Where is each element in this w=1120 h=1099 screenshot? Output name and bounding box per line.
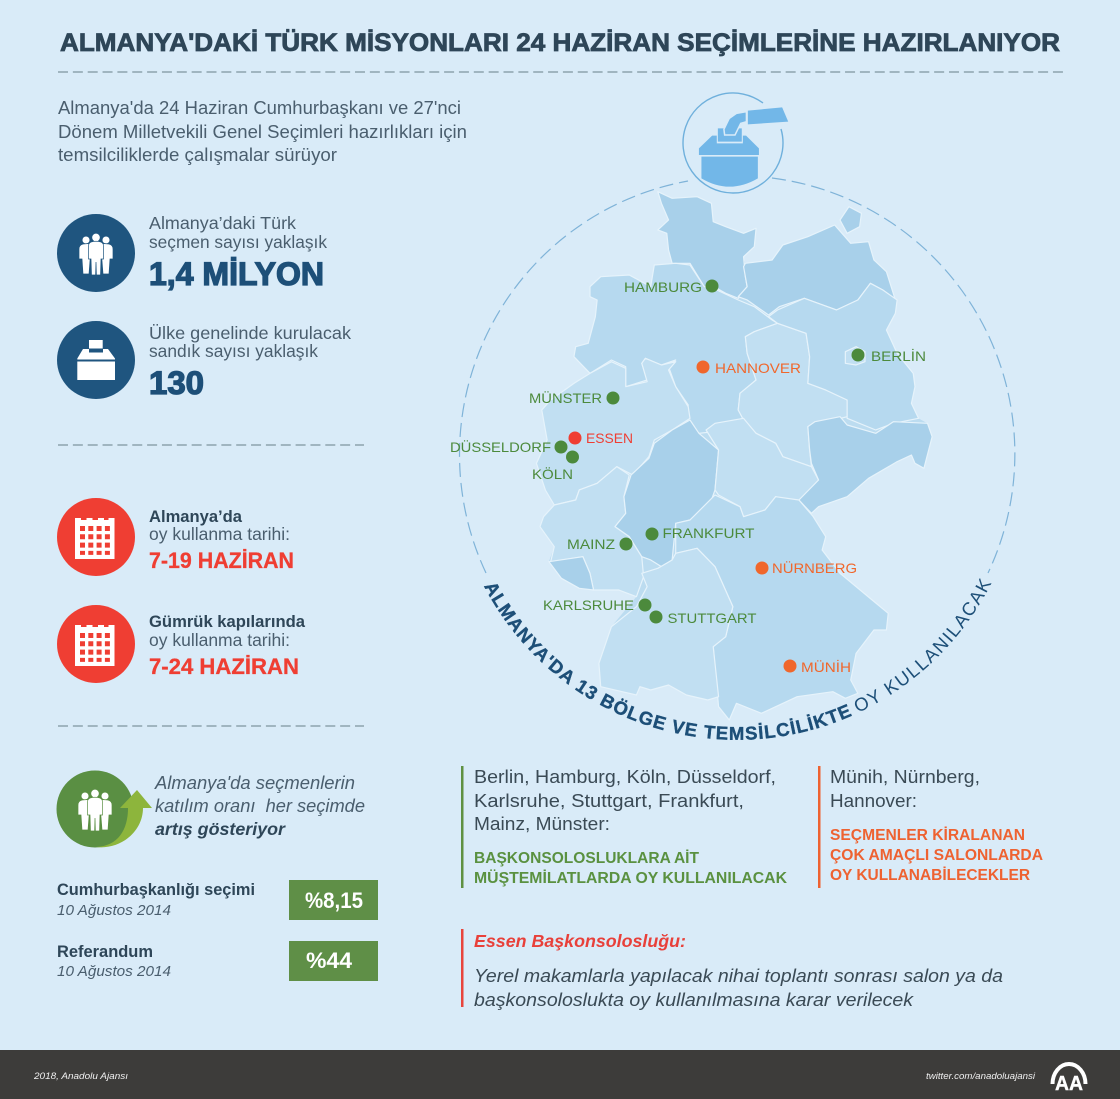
dashed circle [460,178,1015,573]
city: Mainz [567,536,632,552]
turnout callout: artış gösteriyor [155,819,286,839]
city: Münih [784,658,851,675]
voting date: Germany [57,498,294,576]
panel: consulates: Berlin, Hamburg, Köln, Düsseldorf, [474,767,776,787]
panel: consulates: Mainz, Münster: [474,814,610,834]
icon: ballot box with hand [683,93,788,193]
city: Düsseldorf: DÜSSELDORF [450,438,551,455]
city: Münster: MÜNSTER [529,389,602,406]
state: Schleswig-Holstein [658,192,756,298]
city: Hannover: HANNOVER [715,360,801,376]
icon: calendar [57,498,135,576]
state: Berlin [845,347,865,365]
city: Hamburg: HAMBURG [624,279,702,295]
panel: consulates: BAŞKONSOLOSLUKLARA AİT [474,850,700,867]
city: Karlsruhe: KARLSRUHE [543,597,634,613]
icon: AA logo [1052,1064,1086,1095]
city: Mainz: MAINZ [567,536,615,552]
state: Lower Saxony [574,263,777,433]
panel: rented halls: SEÇMENLER KİRALANAN [830,827,1025,844]
panel: consulates: MÜŞTEMİLATLARDA OY KULLANILACAK [474,870,788,887]
footer: 2018, Anadolu Ajansı [33,1071,128,1082]
stat: ballot boxes: Ülke genelinde kurulacak [149,323,351,343]
state: Saxony [799,417,932,513]
state: Mecklenburg-Vorpommern [738,207,895,315]
voting date: customs gates: oy kullanma tarihi: [149,630,290,650]
city: Berlin [852,347,926,364]
turnout callout [56,770,365,848]
turnout row: presidential election [57,880,378,920]
voting date: customs gates [57,605,306,683]
panel: rented halls: ÇOK AMAÇLI SALONLARDA [830,847,1043,864]
panel: rented halls: Hannover: [830,791,917,811]
state: Saarland [549,557,594,590]
intro text: Dönem Milletvekili Genel Seçimleri hazırlıkları için [58,122,467,142]
state: Hesse [615,420,719,567]
panel: consulates: Karlsruhe, Stuttgart, Frankfurt, [474,791,744,811]
state: southern group [540,417,932,720]
city: Stuttgart: STUTTGART [668,610,757,626]
city: Münih: MÜNİH [801,658,851,675]
city: Köln: KÖLN [532,465,573,482]
icon: ballot box [57,321,135,399]
turnout row: referendum [57,941,378,981]
voting date: Germany: oy kullanma tarihi: [149,524,290,544]
stat: voters: 1,4 MİLYON [149,256,324,292]
footer [0,1050,1120,1099]
stat: ballot boxes: 130 [149,365,204,401]
panel: Essen consulate: Yerel makamlarla yapılacak nihai toplantı sonrası salon ya da [474,966,1003,986]
state: Rhineland-Palatinate [540,467,644,597]
stat: ballot boxes: sandık sayısı yaklaşık [149,341,318,361]
state: Baden-Württemberg [599,548,733,700]
turnout callout: katılım oranı her seçimde [155,796,365,816]
curved caption: ALMANYA'DA 13 BÖLGE VE TEMSİLCİLİKTE [484,584,852,740]
state: Saxony-Anhalt [738,323,847,467]
panel: rented halls: OY KULLANABİLECEKLER [830,867,1030,884]
panel: rented halls: Münih, Nürnberg, [830,767,980,787]
state: Bavaria [676,495,888,720]
turnout row: presidential election: 10 Ağustos 2014 [57,902,171,919]
intro text: Almanya'da 24 Haziran Cumhurbaşkanı ve 27'nci [58,98,461,118]
voting date: Germany: Almanya’da [149,508,243,526]
panel: Essen consulate: başkonsoloslukta oy kullanılmasına karar verilecek [474,990,914,1010]
turnout row: presidential election: %8,15 [305,888,363,913]
panel: consulates [461,766,788,888]
city: Nürnberg: NÜRNBERG [772,559,857,576]
city: Köln [532,450,579,482]
city: Berlin: BERLİN [871,347,926,364]
curved caption: OY KULLANILACAK [854,578,992,711]
icon: people with rising arrow [56,770,152,848]
voting date: Germany: 7-19 HAZİRAN [149,548,294,573]
voting date: customs gates: Gümrük kapılarında [149,613,306,631]
panel: Essen consulate: Essen Başkonsolosluğu: [474,931,686,951]
voting date: customs gates: 7-24 HAZİRAN [149,654,299,679]
stat: voters: Almanya’daki Türk [149,213,296,233]
state: Thuringia [706,418,819,517]
panel: Essen consulate [461,929,1003,1010]
footer: twitter.com/anadoluajansi [926,1071,1036,1082]
stat: voters: seçmen sayısı yaklaşık [149,232,327,252]
turnout row: referendum: Referandum [57,943,153,961]
icon: calendar [57,605,135,683]
city: Essen: ESSEN [586,430,633,446]
state: North Rhine-Westphalia [536,358,690,505]
map base [536,192,932,720]
turnout row: presidential election: Cumhurbaşkanlığı seçimi [57,881,255,899]
panel: rented halls [818,766,1043,888]
turnout row: referendum: %44 [306,948,353,973]
stat: ballot boxes [57,321,351,401]
title: ALMANYA'DAKİ TÜRK MİSYONLARI 24 HAZİRAN SEÇİMLERİNE HAZIRLANIYOR [60,28,1060,57]
stat: voters [57,213,327,292]
icon: people [57,214,135,292]
icon: AA logo: AA [1055,1073,1083,1095]
intro text: temsilciliklerde çalışmalar sürüyor [58,145,337,165]
turnout callout: Almanya'da seçmenlerin [154,773,355,793]
city: Frankfurt: FRANKFURT [662,525,755,541]
map of Germany [536,192,932,720]
intro text [58,98,467,165]
turnout row: referendum: 10 Ağustos 2014 [57,963,171,980]
state: Brandenburg [769,283,919,430]
